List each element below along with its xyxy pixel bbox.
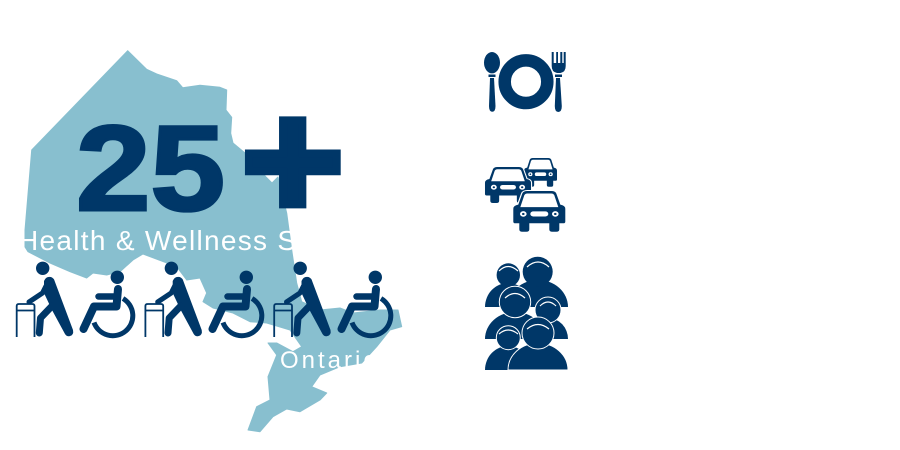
icon: traffic of cars [485,158,565,232]
subtitle: Health & Wellness Services: Health & Wellness Services [18,225,395,256]
icon: person with walker 2 [145,262,202,337]
map of Ontario [25,51,402,432]
icon: plate and cutlery [484,52,566,112]
headline: 25+: + [242,68,344,254]
map label: Ontario: Ontario [280,347,380,374]
icon: wheelchair 2 [212,271,262,336]
icon: group of people [485,257,568,370]
icon: person with walker 1 [17,262,73,337]
icon: person with walker 3 [274,262,331,337]
headline: 25+: 25 [76,100,225,236]
icon: wheelchair 1 [84,271,133,336]
headline: 25+ [76,68,344,254]
icon: wheelchair 3 [342,271,391,336]
